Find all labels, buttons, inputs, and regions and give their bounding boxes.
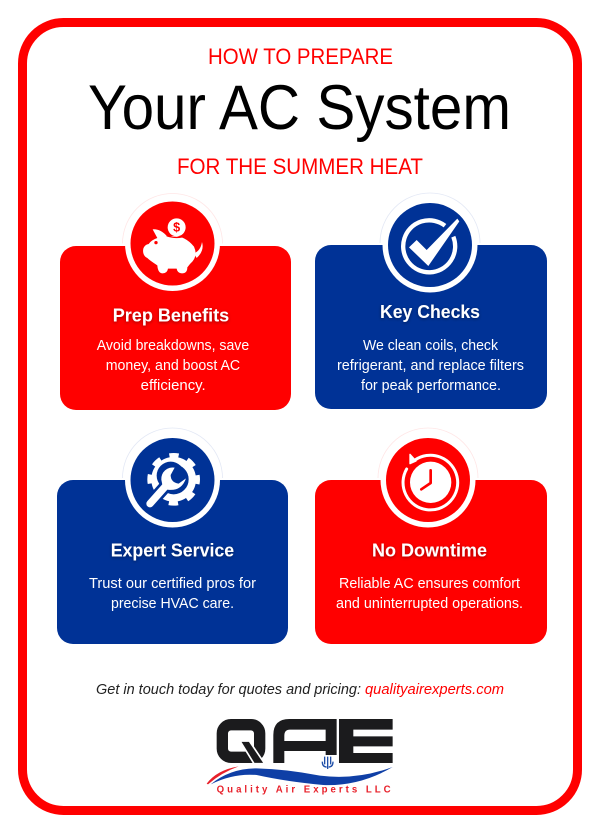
subtitle: FOR THE SUMMER HEAT — [177, 154, 423, 179]
body text — [336, 576, 523, 612]
body text: efficiency. — [141, 378, 206, 394]
logo letter A — [273, 719, 337, 763]
logo small AC icon — [322, 757, 333, 769]
body text: refrigerant, and replace filters — [337, 358, 524, 374]
panel: key checks — [315, 193, 547, 409]
panel: no downtime — [315, 428, 547, 644]
body text — [97, 338, 249, 394]
body text — [337, 338, 524, 394]
body text: Avoid breakdowns, save — [97, 338, 249, 354]
panel background — [57, 480, 288, 644]
icon: clock — [378, 428, 478, 528]
logo letter E — [339, 719, 393, 763]
heading: Prep Benefits — [113, 304, 229, 326]
panel: prep benefits — [60, 194, 291, 410]
heading: No Downtime — [372, 540, 487, 560]
call to action: Get in touch today for quotes and pricing: — [96, 682, 361, 698]
panel background — [315, 480, 547, 644]
body text: Reliable AC ensures comfort — [339, 576, 520, 592]
call to action: qualityairexperts.com — [365, 682, 504, 698]
body text: precise HVAC care. — [111, 596, 234, 612]
logo red swoosh — [207, 766, 239, 784]
heading: Key Checks — [380, 301, 480, 322]
icon: check mark — [380, 193, 480, 292]
logo: Quality Air Experts — [207, 719, 393, 795]
body text: Trust our certified pros for — [89, 576, 256, 592]
body text — [89, 576, 256, 612]
logo letter Q — [222, 725, 265, 764]
body text: and uninterrupted operations. — [336, 596, 523, 612]
logo blue swoosh — [211, 767, 393, 785]
panel: expert service — [57, 428, 288, 644]
icon: piggy bank — [122, 194, 222, 291]
body text: money, and boost AC — [106, 358, 240, 374]
eyebrow heading: HOW TO PREPARE — [208, 44, 393, 69]
panel background — [60, 246, 291, 410]
icon: piggy bank: $ — [173, 221, 180, 235]
panel background — [315, 245, 547, 409]
body text: for peak performance. — [361, 378, 501, 394]
main title: Your AC System — [88, 73, 511, 143]
call to action — [96, 682, 504, 698]
title block — [88, 44, 511, 179]
icon: gear and wrench — [122, 428, 222, 528]
heading: Expert Service — [111, 540, 234, 560]
logo tagline: Quality Air Experts LLC — [217, 784, 391, 795]
body text: We clean coils, check — [363, 338, 499, 354]
